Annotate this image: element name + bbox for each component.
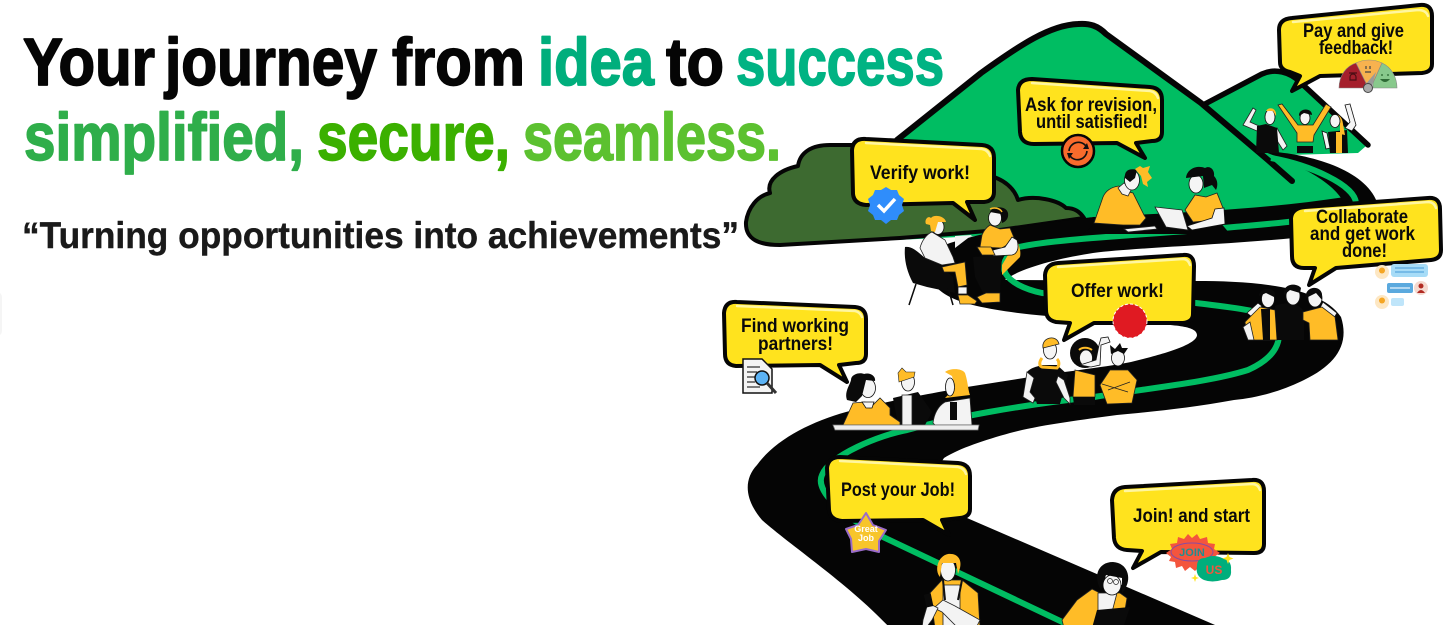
- tagline: “Turning opportunities into achievements”: [22, 215, 739, 256]
- speech bubble: collaborate: [1291, 198, 1441, 285]
- speech bubble: verify work: [852, 139, 994, 220]
- faint edge tab: [0, 292, 2, 336]
- people: verify work pair with chair: [905, 207, 1020, 305]
- icon: great job star: Great: [854, 524, 878, 534]
- title line 2: secure,: [317, 100, 510, 175]
- road curve over mountain: [1262, 151, 1378, 207]
- title line 1: Your: [23, 25, 155, 100]
- speech bubble: find working partners: [724, 302, 866, 382]
- icon: great job star: Job: [858, 533, 874, 543]
- speech bubble: join and start: [1112, 480, 1264, 568]
- bush: [746, 145, 1084, 245]
- title line 2: seamless.: [523, 100, 781, 175]
- title line 2: [24, 100, 781, 175]
- title line 2: simplified,: [24, 100, 304, 175]
- title line 1: success: [736, 25, 944, 100]
- speech bubble: collaborate: Collaborate: [1316, 207, 1408, 228]
- speech bubble: pay and give feedback: feedback!: [1319, 38, 1393, 59]
- road: [748, 197, 1377, 625]
- title line 1: to: [666, 25, 724, 100]
- speech bubble: post your job: Post your Job!: [841, 480, 955, 501]
- icon: document with magnifier: [743, 359, 776, 393]
- speech bubble: verify work: Verify work!: [870, 163, 970, 184]
- people: offer work trio: [1023, 337, 1137, 405]
- icon: refresh circle: [1062, 135, 1094, 167]
- icon: great job star: [846, 513, 886, 552]
- title line 1: from: [392, 25, 525, 100]
- speech bubble: find working partners: Find working: [741, 316, 849, 337]
- green lane: [821, 158, 1356, 625]
- icon: verified badge: [868, 187, 904, 224]
- people: post your job person: [922, 554, 980, 625]
- icon: feedback gauge: [1339, 60, 1397, 92]
- people: join person with tablet: [1062, 562, 1130, 625]
- people: collaborate trio: [1243, 285, 1338, 340]
- speech bubble: join and start: Join! and start: [1133, 506, 1251, 527]
- speech bubble: ask for revision: until satisfied!: [1036, 112, 1148, 133]
- title line 1: idea: [538, 25, 655, 100]
- speech bubble: ask for revision: Ask for revision,: [1025, 95, 1157, 116]
- icon: chat and ideas: [1375, 264, 1428, 309]
- speech bubble: ask for revision: [1018, 79, 1162, 158]
- speech bubble: find working partners: partners!: [758, 334, 833, 355]
- icon: join us sticker: JOIN: [1179, 547, 1205, 559]
- people: pay and give feedback group: [1243, 104, 1356, 153]
- speech bubble: pay and give feedback: [1279, 5, 1432, 91]
- people: find working partners trio at table: [833, 368, 979, 430]
- icon: join us sticker: US: [1206, 563, 1222, 577]
- speech bubble: offer work: Offer work!: [1071, 281, 1164, 302]
- title line 1: journey: [163, 25, 377, 100]
- main mountain: [897, 24, 1350, 240]
- speech bubble: post your job: [827, 457, 970, 535]
- speech bubble: pay and give feedback: Pay and give: [1303, 21, 1404, 42]
- icon: red seal: [1113, 304, 1147, 338]
- title line 1: [23, 25, 944, 100]
- people: ask for revision pair at table: [1083, 166, 1230, 234]
- second mountain: [1203, 71, 1368, 156]
- speech bubble: offer work: [1045, 255, 1194, 340]
- icon: join us sticker: [1166, 534, 1234, 582]
- speech bubble: collaborate: done!: [1342, 241, 1387, 262]
- speech bubble: collaborate: and get work: [1310, 224, 1415, 245]
